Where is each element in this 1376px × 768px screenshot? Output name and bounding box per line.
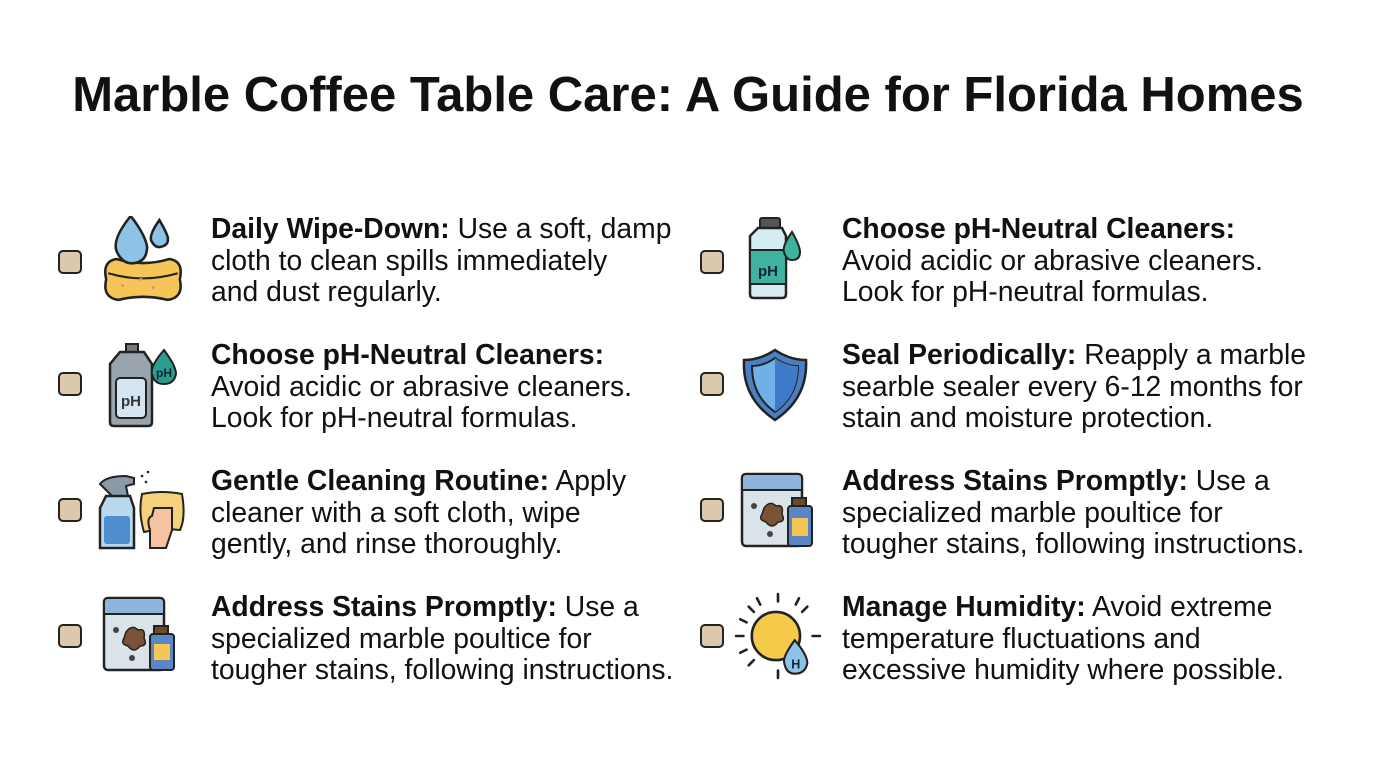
item: address stains right: specialized marble poultice for	[842, 496, 1223, 528]
item: address stains left: Address Stains Promptly: Use a	[211, 590, 639, 622]
text: Daily Wipe-Down: Use a soft, damp	[211, 212, 671, 244]
item: gentle cleaning routine: Gentle Cleaning Routine: Apply	[211, 464, 626, 496]
icon: pH bottle: pH	[121, 393, 141, 410]
item: daily wipe-down	[58, 212, 671, 307]
icon: teal pH bottle: pH	[758, 263, 778, 280]
item: gentle cleaning routine: cleaner with a soft cloth, wipe	[211, 496, 581, 528]
text: and dust regularly.	[211, 275, 442, 307]
item: seal periodically: searble sealer every 6-12 months for	[842, 370, 1303, 402]
item: pH-neutral cleaners left: Choose pH-Neutral Cleaners:	[211, 338, 604, 370]
item: address stains left: tougher stains, following instructions.	[211, 653, 673, 685]
text: cloth to clean spills immediately	[211, 244, 607, 276]
item: address stains right	[700, 464, 1304, 559]
item: manage humidity: Manage Humidity: Avoid extreme	[842, 590, 1272, 622]
item: pH-neutral cleaners left: Look for pH-neutral formulas.	[211, 401, 577, 433]
item: pH-neutral cleaners left	[58, 338, 632, 433]
item: manage humidity: excessive humidity where possible.	[842, 653, 1284, 685]
item: seal periodically: Seal Periodically: Reapply a marble	[842, 338, 1306, 370]
item: address stains right: Address Stains Promptly: Use a	[842, 464, 1270, 496]
icon: poultice pack right	[740, 472, 813, 548]
item: seal periodically	[700, 338, 1306, 433]
title: Marble Coffee Table Care: A Guide for Florida Homes	[72, 68, 1304, 122]
item: manage humidity	[700, 590, 1284, 685]
icon: sponge with drops	[104, 216, 182, 302]
item: address stains left: specialized marble poultice for	[211, 622, 592, 654]
item: pH-neutral cleaners right: Choose pH-Neutral Cleaners:	[842, 212, 1235, 244]
item: address stains left	[58, 590, 673, 685]
item: pH-neutral cleaners right: Avoid acidic or abrasive cleaners.	[842, 244, 1263, 276]
icon: shield	[742, 348, 808, 422]
item: manage humidity: temperature fluctuations and	[842, 622, 1201, 654]
item: pH-neutral cleaners right: Look for pH-neutral formulas.	[842, 275, 1208, 307]
item: gentle cleaning routine: gently, and rinse thoroughly.	[211, 527, 562, 559]
icon: spray bottle and cloth	[98, 470, 185, 550]
icon: sun with drop: H	[791, 657, 800, 671]
item: pH-neutral cleaners right	[700, 212, 1263, 307]
icon: pH bottle: pH	[156, 366, 172, 380]
text	[211, 212, 671, 307]
checkbox	[58, 250, 82, 274]
icon: pH bottle	[108, 343, 177, 428]
icon: sun with drop	[734, 592, 822, 680]
item: pH-neutral cleaners left: Avoid acidic or abrasive cleaners.	[211, 370, 632, 402]
item: address stains right: tougher stains, following instructions.	[842, 527, 1304, 559]
icon: poultice pack	[102, 596, 175, 672]
item: gentle cleaning routine	[58, 464, 626, 559]
item: seal periodically: stain and moisture protection.	[842, 401, 1213, 433]
icon: teal pH bottle	[748, 217, 801, 300]
